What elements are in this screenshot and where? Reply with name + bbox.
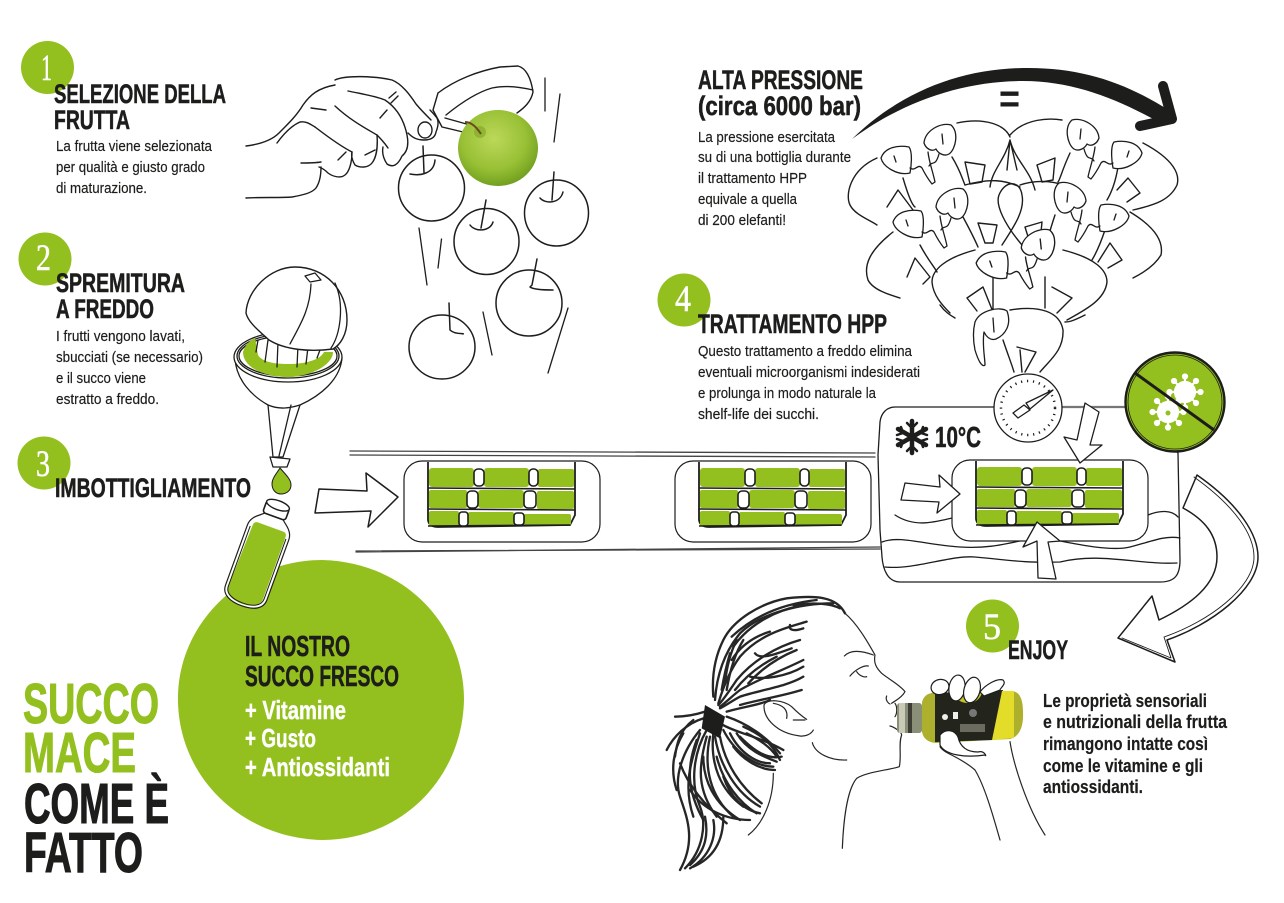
water waves — [882, 511, 1180, 567]
icon: pressure gauge — [994, 374, 1062, 442]
equals sign: = — [999, 77, 1020, 121]
text step 4: eventuali microorganismi indesiderati — [698, 364, 920, 381]
illustration: hand picking apples — [246, 66, 588, 379]
text step 4 — [698, 343, 920, 423]
number badge 1: 1 — [41, 48, 52, 89]
text step 1: per qualità e giusto grado — [56, 159, 205, 176]
step 1: selezione della frutta — [21, 41, 226, 197]
text step 2: sbucciati (se necessario) — [56, 349, 203, 366]
heading step 2 — [56, 268, 185, 324]
text: pressure comparison: di 200 elefanti! — [698, 212, 786, 229]
tray with bottles 3 — [952, 460, 1148, 541]
heading step 4: TRATTAMENTO HPP — [698, 309, 887, 339]
text step 1 — [56, 138, 213, 197]
outline apples — [398, 146, 588, 379]
heading: alta pressione — [698, 65, 863, 121]
elephant bodies — [848, 119, 1178, 372]
heading: il nostro succo fresco: IL NOSTRO — [245, 631, 350, 663]
text step 4: e prolunga in modo naturale la — [698, 385, 877, 402]
elephant top right — [1067, 119, 1142, 179]
icon: snowflake — [897, 421, 927, 453]
tray with bottles 2 — [675, 461, 871, 542]
temperature: 10°C — [935, 422, 981, 454]
number badge 5 — [966, 600, 1019, 652]
hand — [246, 77, 438, 198]
elephant top left — [881, 124, 956, 184]
hair and face — [667, 597, 1045, 870]
text: pressure comparison: su di una bottiglia durante — [698, 149, 851, 166]
text step 5: come le vitamine e gli — [1043, 755, 1203, 776]
falling lines — [419, 78, 568, 373]
peeler handle — [433, 66, 533, 132]
text step 5 — [1043, 690, 1228, 797]
text step 1: La frutta viene selezionata — [56, 138, 213, 155]
text: pressure comparison — [698, 129, 851, 229]
text: pressure comparison: il trattamento HPP — [698, 170, 807, 187]
heading step 1 — [54, 79, 226, 135]
hand holding bottle — [929, 674, 1004, 756]
text step 5: rimangono intatte così — [1043, 733, 1208, 754]
heading: alta pressione: (circa 6000 bar) — [698, 91, 861, 121]
title: SUCCO — [23, 672, 159, 736]
green apple — [458, 110, 538, 186]
text step 4: shelf-life dei succhi. — [698, 406, 819, 423]
juice bottle held by woman — [897, 690, 1023, 743]
step 3: imbottigliamento — [18, 436, 251, 503]
number badge 4: 4 — [675, 279, 691, 320]
number badge 2 — [18, 232, 72, 286]
arrow: big curved outline arrow — [1118, 475, 1258, 662]
elephants pyramid — [848, 119, 1178, 372]
number badge 5: 5 — [983, 607, 1001, 648]
arrow: into tray — [315, 473, 398, 527]
elephant bottom — [974, 309, 1009, 366]
heading step 3: IMBOTTIGLIAMENTO — [55, 473, 251, 503]
heading: il nostro succo fresco — [245, 631, 399, 693]
arrow: curved black swoosh — [852, 68, 1172, 139]
benefits list: + Antiossidanti — [245, 752, 390, 782]
benefits list: + Vitamine — [245, 695, 346, 725]
number badge 4 — [658, 274, 710, 326]
benefits list: + Gusto — [245, 723, 316, 753]
panel: green juice circle — [178, 560, 464, 840]
tray with bottles 1 — [404, 461, 600, 542]
number badge 1 — [21, 41, 74, 94]
arrow: pressure from below — [1023, 522, 1060, 579]
heading step 5: ENJOY — [1008, 635, 1068, 665]
step 2: spremitura a freddo — [18, 232, 203, 408]
step 4: trattamento hpp — [658, 274, 920, 423]
title: MACE — [23, 721, 136, 785]
heading: alta pressione: ALTA PRESSIONE — [698, 65, 863, 95]
heading step 1: FRUTTA — [54, 105, 130, 135]
title — [23, 672, 169, 885]
conveyor belt lines — [350, 451, 880, 552]
illustration: woman drinking — [667, 597, 1045, 870]
heading step 2: SPREMITURA — [56, 268, 185, 298]
number badge 2: 2 — [36, 238, 51, 279]
icon: juice bottle — [221, 493, 300, 613]
heading: il nostro succo fresco: SUCCO FRESCO — [245, 661, 399, 693]
text step 2: estratto a freddo. — [56, 391, 159, 408]
funnel nozzle — [270, 457, 290, 467]
text step 5: Le proprietà sensoriali — [1043, 690, 1207, 711]
heading step 1: SELEZIONE DELLA — [54, 79, 226, 109]
title: FATTO — [24, 821, 143, 885]
text step 2: e il succo viene — [56, 370, 146, 387]
text step 1: di maturazione. — [56, 180, 147, 197]
text step 5: e nutrizionali della frutta — [1043, 711, 1228, 732]
benefits list — [245, 695, 390, 782]
text step 2 — [56, 328, 203, 408]
number badge 3 — [18, 436, 70, 490]
elephant centre — [976, 229, 1055, 289]
illustration: juicer funnel — [234, 267, 347, 494]
arrow: pressure from left — [901, 475, 960, 513]
title: COME È — [24, 772, 169, 836]
text step 4: Questo trattamento a freddo elimina — [698, 343, 913, 360]
number badge 3: 3 — [36, 444, 50, 485]
step 5: enjoy — [966, 600, 1228, 797]
text: pressure comparison: La pressione esercitata — [698, 129, 836, 146]
text step 5: antiossidanti. — [1043, 776, 1143, 797]
icon: no microorganisms — [1126, 352, 1224, 452]
elephant middle left — [893, 188, 968, 248]
arrow: pressure from top — [1064, 403, 1102, 463]
text step 2: I frutti vengono lavati, — [56, 328, 185, 345]
elephant middle right — [1054, 182, 1129, 242]
heading step 2: A FREDDO — [56, 294, 154, 324]
juicer dome — [246, 267, 347, 350]
green drop — [272, 468, 291, 494]
panel: high pressure chamber — [878, 403, 1180, 582]
text: pressure comparison: equivale a quella — [698, 191, 798, 208]
